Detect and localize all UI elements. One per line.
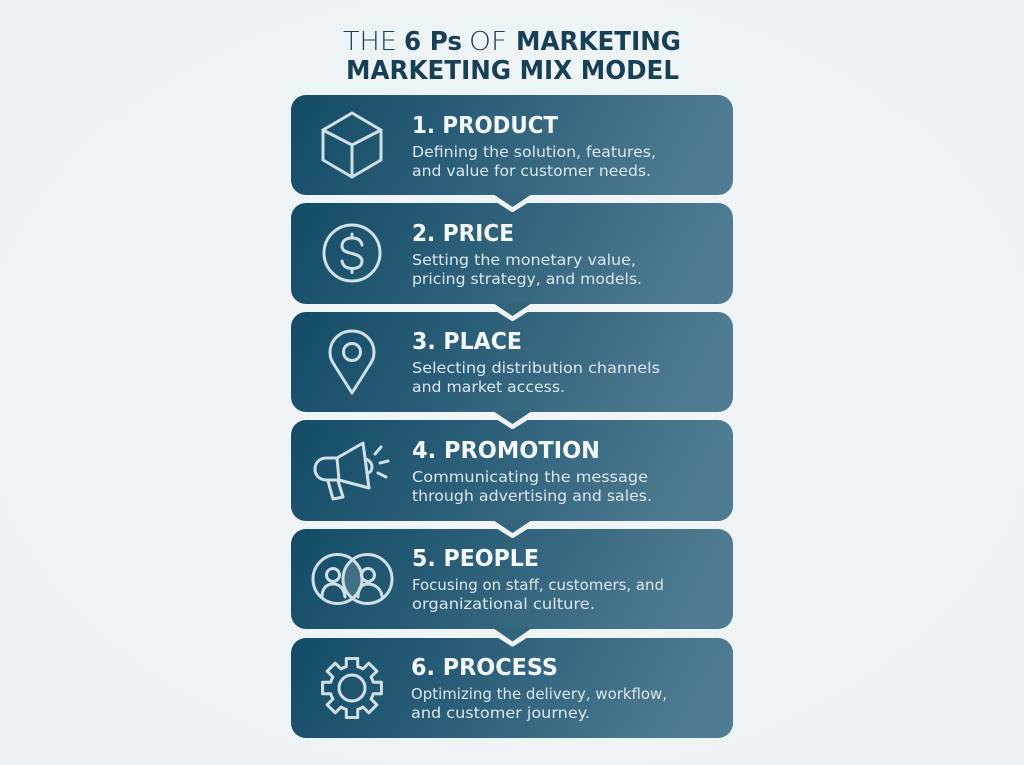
arrow: people to process bbox=[493, 628, 532, 644]
heading: price: 2. PRICE bbox=[412, 219, 514, 247]
heading: product: 1. PRODUCT bbox=[412, 111, 558, 139]
description: place: Selecting distribution channels bbox=[412, 359, 660, 377]
description: product: and value for customer needs. bbox=[412, 162, 651, 180]
panel: 5. People bbox=[291, 529, 733, 629]
panel: 2. Price bbox=[291, 203, 733, 304]
description: price: Setting the monetary value, bbox=[412, 251, 636, 269]
icon: box bbox=[323, 113, 381, 177]
arrow: product to price bbox=[493, 194, 532, 210]
icon: map pin bbox=[330, 331, 374, 393]
title bbox=[343, 27, 681, 86]
description: people: organizational culture. bbox=[412, 595, 595, 613]
title: 6 Ps bbox=[404, 27, 462, 57]
panel: 3. Place bbox=[291, 312, 733, 412]
heading: place: 3. PLACE bbox=[412, 327, 522, 355]
description: promotion: through advertising and sales. bbox=[412, 487, 652, 505]
icon: megaphone bbox=[315, 443, 388, 499]
heading: promotion: 4. PROMOTION bbox=[412, 436, 600, 464]
description: promotion: Communicating the message bbox=[412, 468, 648, 486]
description: place: and market access. bbox=[412, 378, 565, 396]
description: product bbox=[412, 143, 656, 180]
description: price: pricing strategy, and models. bbox=[412, 270, 642, 288]
description: promotion bbox=[412, 468, 652, 505]
panel: 6. Process bbox=[291, 638, 733, 738]
icon: overlapping people bbox=[313, 554, 392, 604]
description: people bbox=[412, 576, 664, 613]
icon: gear bbox=[323, 659, 381, 717]
icon: dollar coin bbox=[324, 225, 380, 281]
arrow: price to place bbox=[493, 303, 532, 318]
description: place bbox=[412, 359, 660, 396]
description: process: and customer journey. bbox=[411, 704, 590, 722]
panel: 1. Product bbox=[291, 95, 733, 195]
title: MARKETING MIX MODEL bbox=[346, 56, 679, 86]
title: OF bbox=[469, 27, 507, 57]
description: product: Defining the solution, features, bbox=[412, 143, 656, 161]
description: process: Optimizing the delivery, workflow, bbox=[411, 685, 667, 703]
description: process bbox=[411, 685, 667, 722]
title: MARKETING bbox=[516, 27, 681, 57]
heading: people: 5. PEOPLE bbox=[412, 544, 539, 572]
heading: process: 6. PROCESS bbox=[411, 653, 558, 681]
description: price bbox=[412, 251, 642, 288]
title: THE bbox=[343, 27, 397, 57]
arrow: place to promotion bbox=[493, 411, 532, 426]
description: people: Focusing on staff, customers, and bbox=[412, 576, 664, 594]
panel: 4. Promotion bbox=[291, 420, 733, 521]
arrow: promotion to people bbox=[493, 520, 532, 536]
